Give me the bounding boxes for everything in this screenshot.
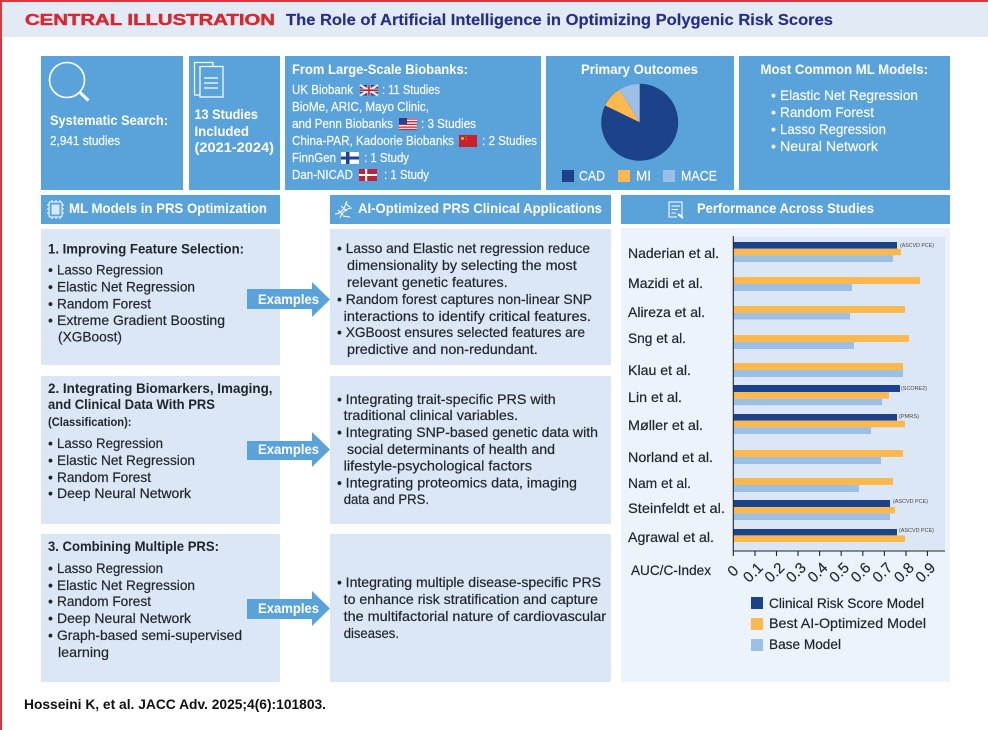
UK biobank row: : 11 Studies — [382, 83, 440, 97]
studies included text: 13 Studies — [194, 106, 258, 122]
panel: feature selection applications: predictive and non-redundant. — [347, 341, 538, 357]
arrow: examples 3 — [247, 591, 330, 626]
study labels: Klau et al. — [628, 362, 691, 378]
arrow: examples 2 — [247, 432, 330, 467]
panel: combining multiple PRS: Elastic Net Regression — [57, 577, 195, 593]
panel: integrating biomarkers: • — [48, 435, 53, 451]
study labels: Alireza et al. — [628, 304, 705, 320]
bar chart — [628, 236, 945, 586]
panel: improving feature selection: (XGBoost) — [58, 328, 122, 344]
models list — [771, 87, 918, 154]
section header: clinical applications: AI-Optimized PRS Clinical Applications — [358, 200, 602, 216]
panel: feature selection applications: • — [337, 291, 342, 307]
panel: combining multiple PRS: • — [48, 577, 53, 593]
panel: integration applications: Integrating proteomics data, imaging — [346, 474, 577, 490]
panel: studies included — [189, 56, 280, 190]
panel: combining multiple PRS: • — [48, 610, 53, 626]
panel: integration applications: traditional clinical variables. — [344, 407, 518, 423]
models heading: Most Common ML Models: — [760, 61, 928, 77]
bar annotations: (ASCVD PCE) — [900, 243, 934, 249]
panel: feature selection applications: • — [337, 240, 342, 256]
China biobanks row: China-PAR, Kadoorie Biobanks — [292, 134, 454, 148]
study labels — [628, 245, 725, 545]
search count: 2,941 studies — [50, 134, 120, 148]
bars — [733, 242, 920, 542]
section header: performance — [621, 195, 950, 224]
arrow: examples 3: Examples — [258, 600, 319, 616]
models list: • — [771, 104, 776, 120]
axis tick labels: 0.2 — [761, 559, 788, 586]
panel: combining multiple PRS: • — [48, 627, 53, 643]
pie chart — [601, 84, 678, 161]
panel: multiple PRS applications: • — [337, 574, 342, 590]
panel: integrating biomarkers: (Classification): — [48, 417, 132, 429]
icon: Finland flag — [341, 152, 359, 164]
axis tick labels: 0 — [724, 562, 742, 580]
axis tick labels: 0.7 — [869, 559, 896, 586]
studies included text: (2021-2024) — [194, 139, 274, 155]
chart legend: Base Model — [769, 636, 841, 652]
axis tick labels — [724, 559, 939, 586]
heading label: central illustration: CENTRAL ILLUSTRATION — [25, 12, 275, 29]
icon: UK flag — [360, 85, 378, 96]
panel: integration applications: • — [337, 391, 342, 407]
study labels: Mazidi et al. — [628, 275, 703, 291]
section header: ML models — [41, 195, 280, 224]
panel: improving feature selection — [41, 229, 280, 365]
models list: Neural Network — [780, 138, 879, 154]
panel: combining multiple PRS: • — [48, 593, 53, 609]
panel: integrating biomarkers: and Clinical Data With PRS — [48, 396, 215, 412]
panel: integration applications — [330, 376, 611, 524]
panel: combining multiple PRS: learning — [58, 644, 109, 660]
Denmark row: : 1 Study — [384, 168, 430, 182]
icon: magnifying glass — [50, 62, 88, 100]
panel: improving feature selection: • — [48, 262, 53, 278]
study labels: Nam et al. — [628, 475, 691, 491]
panel: improving feature selection: • — [48, 296, 53, 312]
axis tick labels: 0.3 — [783, 559, 810, 586]
models list: • — [771, 121, 776, 137]
panel: feature selection applications: Lasso and Elastic net regression reduce — [346, 240, 590, 256]
panel: improving feature selection: • — [48, 312, 53, 328]
panel: integration applications: social determinants of health and — [347, 441, 555, 457]
panel: integrating biomarkers: Lasso Regression — [57, 435, 163, 451]
bar annotations — [893, 243, 934, 534]
panel: improving feature selection: • — [48, 278, 53, 294]
pie legend: CAD — [579, 168, 605, 184]
models list: Random Forest — [780, 104, 874, 120]
icon: documents — [194, 62, 223, 97]
panel: integrating biomarkers: Random Forest — [57, 469, 151, 485]
panel: integration applications: Integrating trait-specific PRS with — [346, 391, 556, 407]
Finland row — [292, 151, 410, 165]
arrow: examples 2: Examples — [258, 441, 319, 457]
icon: Denmark flag — [359, 169, 377, 181]
US biobanks row: : 3 Studies — [421, 117, 476, 131]
panel: integrating biomarkers: • — [48, 452, 53, 468]
models list: Lasso Regression — [780, 121, 886, 137]
panel: combining multiple PRS: • — [48, 560, 53, 576]
study labels: Sng et al. — [628, 330, 686, 346]
panel: multiple PRS applications: Integrating multiple disease-specific PRS — [346, 574, 601, 590]
China biobanks row: : 2 Studies — [482, 134, 537, 148]
axis tick labels: 0.4 — [805, 559, 831, 586]
icon: US flag — [399, 118, 417, 130]
panel: feature selection applications: • — [337, 324, 342, 340]
study labels: Agrawal et al. — [628, 529, 714, 545]
title banner — [2, 2, 988, 37]
icon: report — [669, 202, 683, 218]
panel: multiple PRS applications — [330, 534, 611, 682]
axis tick labels: 0.8 — [891, 559, 918, 586]
search heading: Systematic Search: — [50, 112, 168, 128]
panel: integration applications: • — [337, 474, 342, 490]
panel: feature selection applications: interactions to identify critical features. — [344, 308, 591, 324]
panel: most common ML models — [739, 56, 950, 190]
panel: integrating biomarkers: • — [48, 469, 53, 485]
study labels: Møller et al. — [628, 417, 703, 433]
axis tick labels: 0.9 — [912, 559, 939, 586]
axis title: AUC/C-Index — [631, 562, 711, 578]
Finland row: : 1 Study — [364, 151, 410, 165]
US biobanks row: and Penn Biobanks — [292, 117, 393, 131]
pie legend: MACE — [681, 168, 717, 184]
axis tick labels: 0.1 — [740, 559, 767, 586]
outcomes heading: Primary Outcomes — [581, 61, 698, 77]
panel: integrating biomarkers: 2. Integrating Biomarkers, Imaging, — [48, 380, 272, 396]
panel: combining multiple PRS: Deep Neural Network — [57, 610, 192, 626]
UK biobank row — [292, 83, 440, 97]
heading: figure title: The Role of Artificial Intelligence in Optimizing Polygenic Risk Scores — [286, 12, 833, 29]
panel: integrating biomarkers: Elastic Net Regression — [57, 452, 195, 468]
arrow: examples 1: Examples — [258, 291, 319, 307]
chart legend: Best AI-Optimized Model — [769, 615, 926, 631]
biobanks heading: From Large-Scale Biobanks: — [292, 61, 468, 77]
panel: multiple PRS applications: the multifactorial nature of cardiovascular — [344, 608, 606, 624]
study labels: Naderian et al. — [628, 245, 719, 261]
panel: feature selection applications — [330, 229, 611, 365]
study labels: Steinfeldt et al. — [628, 500, 725, 516]
panel: improving feature selection: Extreme Gradient Boosting — [57, 312, 225, 328]
study labels: Lin et al. — [628, 389, 682, 405]
bar annotations: (ASCVD PCE) — [893, 499, 928, 505]
panel: integration applications: lifestyle-psychological factors — [344, 458, 532, 474]
panel: integration applications: Integrating SNP-based genetic data with — [346, 424, 598, 440]
models list: • — [771, 87, 776, 103]
panel: integrating biomarkers — [41, 376, 280, 524]
panel: performance across studies — [621, 228, 950, 682]
arrow: examples 1 — [247, 282, 330, 317]
panel: combining multiple PRS — [41, 534, 280, 682]
panel: feature selection applications: Random forest captures non-linear SNP — [346, 291, 592, 307]
chart legend — [751, 595, 926, 652]
axis tick labels: 0.5 — [826, 559, 853, 586]
pie legend: MI — [636, 168, 651, 184]
panel: combining multiple PRS: Random Forest — [57, 593, 151, 609]
Denmark row: Dan-NICAD — [292, 168, 353, 182]
US biobanks row — [292, 100, 476, 131]
models list: Elastic Net Regression — [780, 87, 918, 103]
panel: improving feature selection: 1. Improving Feature Selection: — [48, 240, 244, 256]
panel: feature selection applications: XGBoost ensures selected features are — [346, 324, 585, 340]
panel: biobanks — [285, 56, 541, 190]
panel: combining multiple PRS: Lasso Regression — [57, 560, 163, 576]
Denmark row — [292, 168, 430, 182]
panel: improving feature selection: Elastic Net Regression — [57, 278, 195, 294]
panel: improving feature selection: Lasso Regression — [57, 262, 163, 278]
bar annotations: (ASCVD PCE) — [899, 528, 934, 534]
section header: clinical applications — [330, 195, 611, 224]
chart legend: Clinical Risk Score Model — [769, 595, 924, 611]
icon: AI chip — [47, 200, 64, 219]
UK biobank row: UK Biobank — [292, 83, 354, 97]
studies included text: Included — [194, 123, 249, 139]
icon: DNA helix — [335, 201, 352, 218]
section header: performance: Performance Across Studies — [697, 200, 874, 216]
Finland row: FinnGen — [292, 151, 336, 165]
panel: combining multiple PRS: 3. Combining Multiple PRS: — [48, 538, 219, 554]
panel: multiple PRS applications: diseases. — [344, 625, 399, 641]
panel: systematic search — [41, 56, 183, 190]
citation footer: Hosseini K, et al. JACC Adv. 2025;4(6):101803. — [24, 697, 326, 712]
panel: integration applications: data and PRS. — [344, 491, 429, 507]
panel: integrating biomarkers: Deep Neural Network — [57, 485, 192, 501]
panel: multiple PRS applications: to enhance risk stratification and capture — [344, 591, 598, 607]
panel: combining multiple PRS: Graph-based semi-supervised — [57, 627, 242, 643]
icon: China flag — [459, 135, 477, 147]
panel: integrating biomarkers: • — [48, 485, 53, 501]
panel: integration applications: • — [337, 424, 342, 440]
axes — [733, 236, 945, 556]
studies included text — [194, 106, 274, 155]
pie legend — [562, 168, 717, 184]
panel: improving feature selection: Random Forest — [57, 296, 151, 312]
panel: feature selection applications: dimensionality by selecting the most — [347, 257, 577, 273]
models list: • — [771, 138, 776, 154]
US biobanks row: BioMe, ARIC, Mayo Clinic, — [292, 100, 429, 114]
axis tick labels: 0.6 — [848, 559, 875, 586]
panel: primary outcomes — [546, 56, 734, 190]
panel: feature selection applications: relevant genetic features. — [347, 274, 508, 290]
bar annotations: (PMRS) — [899, 414, 919, 420]
section header: ML models: ML Models in PRS Optimization — [69, 200, 267, 216]
study labels: Norland et al. — [628, 449, 713, 465]
bar annotations: (SCORE2) — [901, 386, 927, 392]
